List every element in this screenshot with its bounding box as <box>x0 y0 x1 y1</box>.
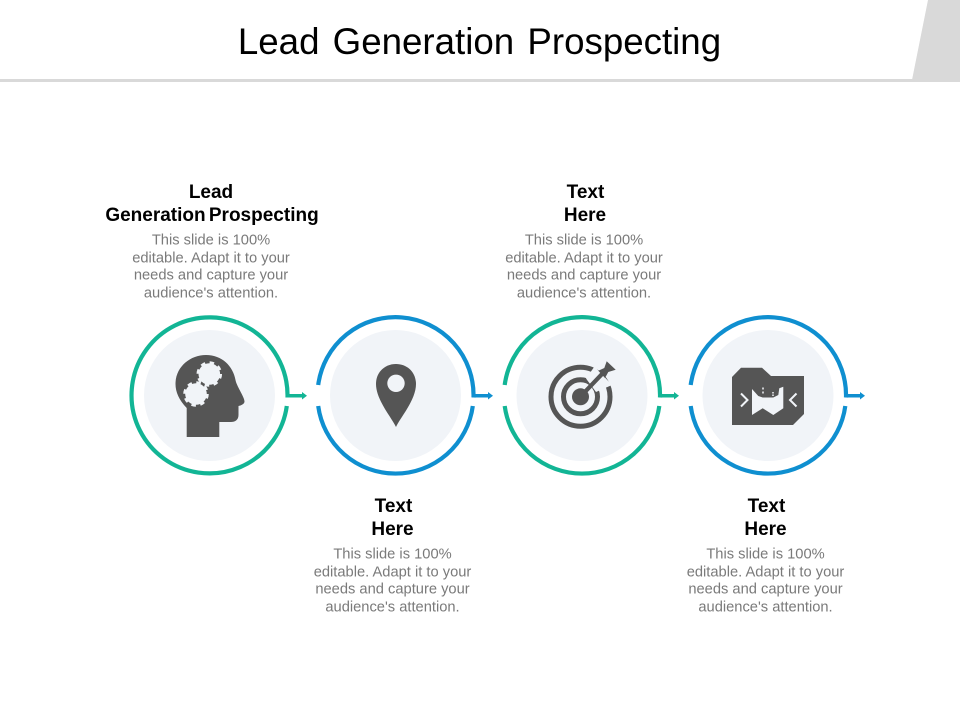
step 2: blue ring with pin icon <box>318 317 493 474</box>
text block: lead generation prospecting: Lead <box>189 182 233 203</box>
arrow: teal <box>659 392 679 400</box>
title: Lead Generation Prospecting <box>238 21 721 62</box>
text block: step 4: Here <box>744 519 787 540</box>
text block: lead generation prospecting <box>105 182 319 302</box>
icon: target with arrow <box>551 361 616 426</box>
text block: lead generation prospecting: audience's attention. <box>144 286 278 302</box>
text block: lead generation prospecting: This slide is 100% <box>152 232 270 248</box>
text block: step 3: editable. Adapt it to your <box>505 250 663 266</box>
ring: blue <box>318 317 474 474</box>
text block: step 4 <box>687 496 844 616</box>
text block: step 2: Here <box>371 519 414 540</box>
text block: step 4: audience's attention. <box>698 600 833 616</box>
text block: step 2: needs and capture your <box>315 582 470 598</box>
header bar <box>0 0 960 82</box>
text block: step 4: editable. Adapt it to your <box>687 564 844 580</box>
text block: step 2 <box>314 496 471 616</box>
step 3: teal ring with target icon <box>505 317 679 474</box>
ring: teal <box>505 317 660 474</box>
text block: step 4: Text <box>748 496 786 517</box>
text block: step 2: Text <box>375 496 413 517</box>
text block: step 3: Text <box>567 182 605 203</box>
text block: step 2: editable. Adapt it to your <box>314 564 471 580</box>
icon: folder with map <box>732 368 804 425</box>
arrow: blue <box>472 392 493 400</box>
text block: step 4: This slide is 100% <box>706 546 825 562</box>
text block: step 3: audience's attention. <box>517 286 651 302</box>
step 1: teal ring with head icon <box>132 317 307 473</box>
text block: lead generation prospecting: Generation Prospecting <box>105 205 319 226</box>
text block: step 3: This slide is 100% <box>525 232 643 248</box>
text block: step 2: This slide is 100% <box>333 546 452 562</box>
step 4: blue ring with folder icon <box>691 317 865 474</box>
text block: step 3: Here <box>564 205 606 226</box>
text block: step 4: needs and capture your <box>688 582 843 598</box>
ring: blue <box>691 317 846 474</box>
arrow: blue <box>845 392 865 400</box>
text block: lead generation prospecting: needs and capture your <box>134 268 288 284</box>
icon: location pin <box>376 364 416 427</box>
text block: lead generation prospecting: editable. Adapt it to your <box>132 250 290 266</box>
text block: step 3 <box>505 182 663 302</box>
text block: step 3: needs and capture your <box>507 268 661 284</box>
ring: teal <box>132 317 288 473</box>
text block: step 2: audience's attention. <box>325 600 460 616</box>
arrow: teal <box>286 392 307 400</box>
icon: head with gears <box>176 355 244 437</box>
